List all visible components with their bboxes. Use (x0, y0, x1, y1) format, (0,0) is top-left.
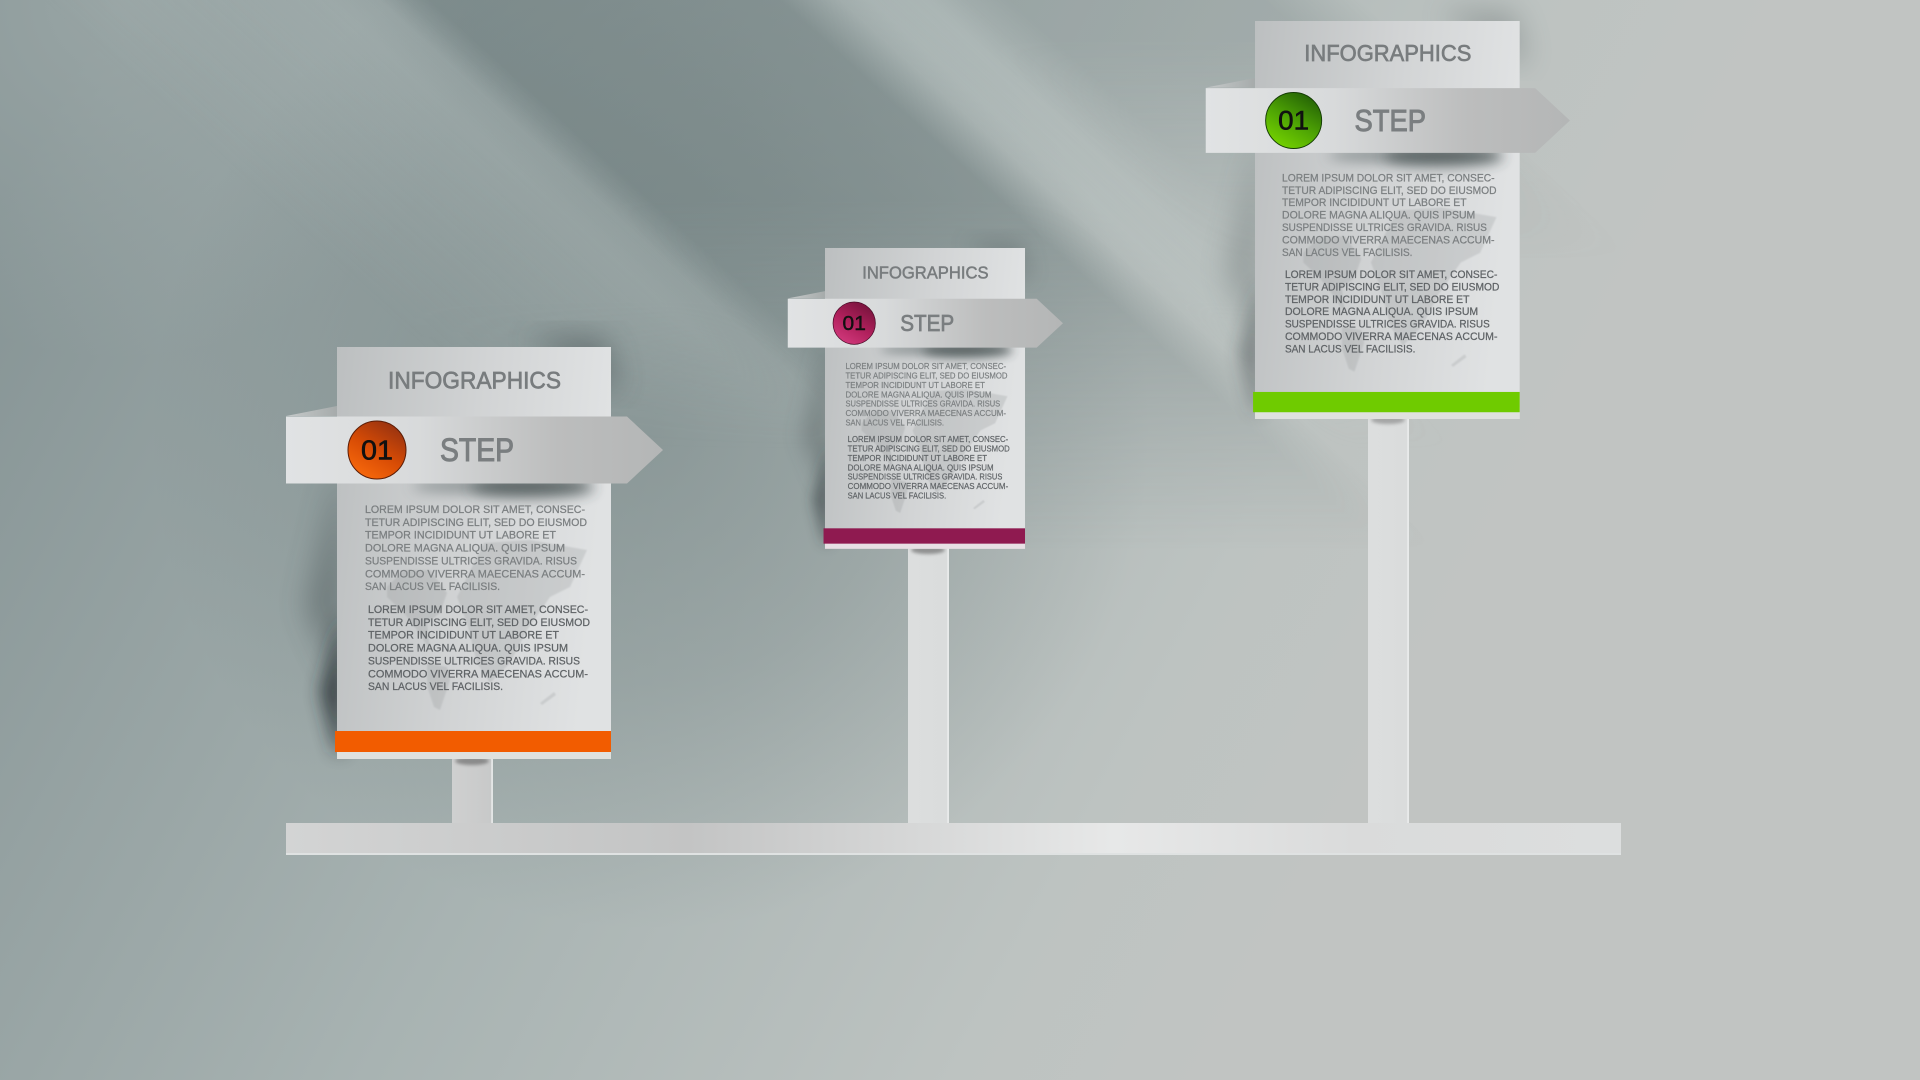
ribbon shadow (412, 477, 594, 497)
text block 1 (1282, 172, 1497, 259)
text block 2: SUSPENDISSE ULTRICES GRAVIDA. RISUS (848, 473, 1002, 482)
ribbon arrow (286, 416, 663, 484)
text block 2: TEMPOR INCIDIDUNT UT LABORE ET (1285, 294, 1470, 306)
step label: STEP (440, 432, 514, 468)
text block 2: LOREM IPSUM DOLOR SIT AMET, CONSEC- (368, 604, 588, 616)
card footer strip (825, 540, 1025, 549)
text block 1: TETUR ADIPISCING ELIT, SED DO EIUSMOD (1282, 185, 1497, 197)
text block 1: COMMODO VIVERRA MAECENAS ACCUM- (365, 568, 585, 580)
step number badge (348, 421, 406, 479)
text block 1: DOLORE MAGNA ALIQUA. QUIS IPSUM (1282, 210, 1475, 222)
panel shadows (307, 337, 619, 752)
colour bar (824, 528, 1025, 544)
text block 1: SAN LACUS VEL FACILISIS. (1282, 247, 1412, 259)
ribbon arrow (1206, 88, 1570, 153)
step number badge: 01 (1278, 106, 1309, 136)
step label: STEP (900, 310, 954, 336)
step number badge (833, 302, 875, 344)
panel shadows (1226, 11, 1527, 412)
text block 2: SUSPENDISSE ULTRICES GRAVIDA. RISUS (1285, 319, 1490, 331)
step number badge: 01 (361, 434, 393, 466)
card footer strip (337, 747, 611, 759)
text block 1: COMMODO VIVERRA MAECENAS ACCUM- (1282, 234, 1495, 246)
heading: INFOGRAPHICS (1304, 40, 1471, 66)
text block 2: TETUR ADIPISCING ELIT, SED DO EIUSMOD (368, 617, 590, 629)
text block 2: COMMODO VIVERRA MAECENAS ACCUM- (1285, 331, 1498, 343)
text block 2: SAN LACUS VEL FACILISIS. (848, 491, 946, 500)
text block 1: TEMPOR INCIDIDUNT UT LABORE ET (1282, 197, 1467, 209)
text block 1: LOREM IPSUM DOLOR SIT AMET, CONSEC- (845, 362, 1006, 371)
text block 2: TETUR ADIPISCING ELIT, SED DO EIUSMOD (848, 445, 1010, 454)
panel: step 1 orange (286, 337, 663, 759)
step label: STEP (1354, 103, 1426, 138)
text block 2: DOLORE MAGNA ALIQUA. QUIS IPSUM (848, 463, 994, 472)
panel: step 2 magenta (788, 241, 1063, 549)
text block 2: TEMPOR INCIDIDUNT UT LABORE ET (848, 454, 987, 463)
text block 1: SAN LACUS VEL FACILISIS. (845, 418, 944, 427)
card body (825, 248, 1025, 549)
colour bar (335, 731, 611, 752)
text block 2: DOLORE MAGNA ALIQUA. QUIS IPSUM (1285, 306, 1478, 318)
text block 2: DOLORE MAGNA ALIQUA. QUIS IPSUM (368, 643, 568, 655)
text block 1: TETUR ADIPISCING ELIT, SED DO EIUSMOD (365, 517, 587, 529)
ribbon fold (286, 406, 337, 416)
text block 1: TEMPOR INCIDIDUNT UT LABORE ET (845, 381, 985, 390)
text block 2: SUSPENDISSE ULTRICES GRAVIDA. RISUS (368, 655, 580, 667)
heading: INFOGRAPHICS (862, 262, 989, 282)
text block 1: DOLORE MAGNA ALIQUA. QUIS IPSUM (845, 390, 992, 399)
text block 1: LOREM IPSUM DOLOR SIT AMET, CONSEC- (1282, 172, 1495, 184)
world map (1303, 207, 1496, 372)
text block 2: SAN LACUS VEL FACILISIS. (368, 681, 503, 693)
base bar (286, 823, 1621, 855)
text block 1: COMMODO VIVERRA MAECENAS ACCUM- (845, 409, 1006, 418)
card footer strip (1255, 407, 1520, 419)
card body (1255, 21, 1520, 419)
text block 1: TETUR ADIPISCING ELIT, SED DO EIUSMOD (845, 372, 1008, 381)
world map (387, 540, 587, 710)
ribbon fold (1206, 78, 1255, 88)
card body (337, 347, 611, 759)
text block 1: SUSPENDISSE ULTRICES GRAVIDA. RISUS (1282, 222, 1487, 234)
text block 2: SAN LACUS VEL FACILISIS. (1285, 343, 1415, 355)
text block 1 (845, 362, 1008, 427)
text block 1: LOREM IPSUM DOLOR SIT AMET, CONSEC- (365, 504, 585, 516)
text block 2: LOREM IPSUM DOLOR SIT AMET, CONSEC- (1285, 269, 1498, 281)
text block 1: SUSPENDISSE ULTRICES GRAVIDA. RISUS (365, 555, 577, 567)
panel: step 3 green (1206, 11, 1570, 419)
text block 1: TEMPOR INCIDIDUNT UT LABORE ET (365, 530, 556, 542)
text block 1: SAN LACUS VEL FACILISIS. (365, 581, 500, 593)
world map (862, 389, 1008, 513)
text block 2: COMMODO VIVERRA MAECENAS ACCUM- (848, 482, 1009, 491)
text block 2 (368, 604, 590, 693)
panel shadows (803, 241, 1031, 544)
text block 1: SUSPENDISSE ULTRICES GRAVIDA. RISUS (845, 400, 1000, 409)
text block 2 (1285, 269, 1500, 355)
step number badge: 01 (843, 312, 866, 335)
ribbon shadow (880, 343, 1013, 358)
ribbon fold (788, 291, 825, 298)
heading: INFOGRAPHICS (388, 368, 561, 394)
text block 2: TETUR ADIPISCING ELIT, SED DO EIUSMOD (1285, 281, 1500, 293)
post: step 2 (908, 545, 949, 825)
text block 2 (848, 435, 1010, 500)
text block 1 (365, 504, 587, 593)
text block 2: TEMPOR INCIDIDUNT UT LABORE ET (368, 630, 559, 642)
text block 2: COMMODO VIVERRA MAECENAS ACCUM- (368, 668, 588, 680)
ribbon arrow (788, 299, 1063, 348)
post: step 1 (452, 755, 493, 825)
colour bar (1253, 392, 1520, 412)
text block 1: DOLORE MAGNA ALIQUA. QUIS IPSUM (365, 543, 565, 555)
post: step 3 (1368, 415, 1409, 825)
text block 2: LOREM IPSUM DOLOR SIT AMET, CONSEC- (848, 435, 1009, 444)
ribbon shadow (1327, 147, 1503, 166)
step number badge (1266, 92, 1322, 149)
